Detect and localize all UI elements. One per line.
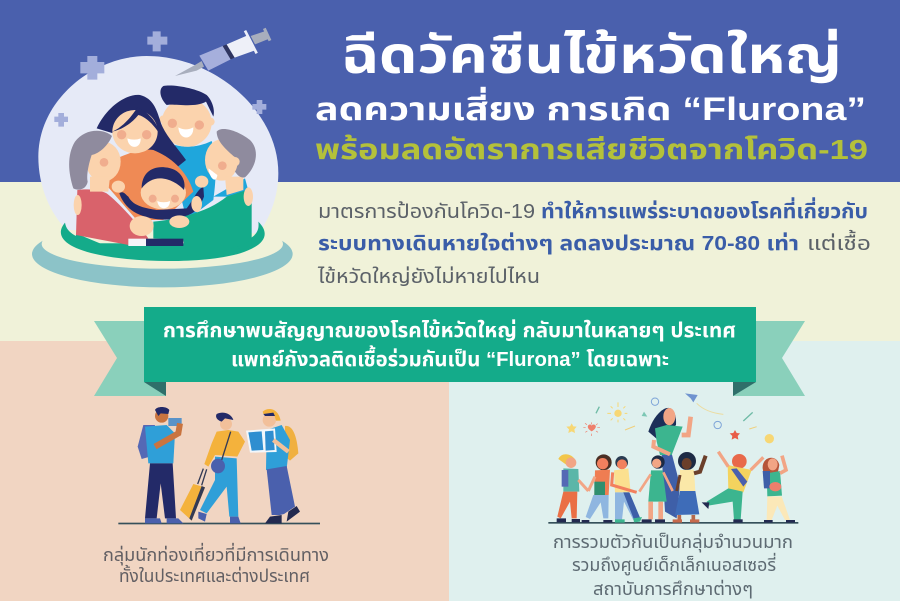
ribbon text: แพทย์กังวลติดเชื้อร่วมกันเป็น “Flurona” โดยเฉพาะ <box>231 345 669 371</box>
child seven <box>763 456 795 523</box>
caption: travellers: ทั้งในประเทศและต่างประเทศ <box>119 564 310 586</box>
caption: gatherings: สถาบันการศึกษาต่างๆ <box>593 579 753 599</box>
panel: cream intro background <box>0 182 900 341</box>
title <box>315 27 868 165</box>
hugging hands and trousers <box>128 196 202 246</box>
traveller with camera <box>138 407 183 523</box>
medical crosses <box>54 31 266 127</box>
caption: gatherings: การรวมตัวกันเป็นกลุ่มจำนวนมาก <box>553 532 793 553</box>
panel: blue header background <box>0 0 900 182</box>
panel: light teal gatherings background <box>449 341 900 601</box>
child five <box>673 452 706 523</box>
traveller with suitcase <box>180 413 245 523</box>
child one <box>557 454 588 522</box>
child six <box>702 452 763 523</box>
caption: travellers: กลุ่มนักท่องเที่ยวที่มีการเดินทาง <box>103 542 329 566</box>
text block: intro paragraph: ทำให้การแพร่ระบาดของโรคที่เกี่ยวกับ <box>541 197 868 223</box>
icon: family inside protective dome <box>32 28 293 287</box>
ribbon text <box>163 320 736 371</box>
icon: teacher and children <box>548 393 798 524</box>
child four <box>639 455 673 523</box>
children <box>557 452 795 523</box>
text block: intro paragraph: ระบบทางเดินหายใจต่างๆ ลดลงประมาณ 70-80 เท่า <box>318 233 799 255</box>
child <box>112 167 208 220</box>
teacher <box>648 408 691 518</box>
traveller with map <box>246 409 300 523</box>
ribbon text: การศึกษาพบสัญญาณของโรคไข้หวัดใหญ่ กลับมาในหลายๆ ประเทศ <box>163 320 736 342</box>
icon: three travellers <box>118 407 320 524</box>
grandfather <box>153 129 256 255</box>
caption: travellers <box>103 542 329 586</box>
father <box>159 86 216 220</box>
title: ลดความเสี่ยง การเกิด “Flurona” <box>315 86 866 127</box>
text block: intro paragraph <box>317 197 871 288</box>
text block: intro paragraph: มาตรการป้องกันโควิด-19 <box>318 201 535 223</box>
caption: gatherings: รวมถึงศูนย์เด็กเล็กเนอสเซอรี่ <box>572 552 776 577</box>
caption: gatherings <box>553 532 793 599</box>
title: พร้อมลดอัตราการเสียชีวิตจากโควิด-19 <box>315 134 868 165</box>
title: ฉีดวัคซีนไข้หวัดใหญ่ <box>341 27 842 85</box>
decorations <box>566 393 774 443</box>
panel: peach travellers background <box>0 341 449 601</box>
child three <box>612 456 642 523</box>
grandmother <box>69 131 148 245</box>
ribbon banner <box>94 307 805 396</box>
child two <box>582 454 612 523</box>
text block: intro paragraph: แต่เชื้อ <box>807 229 871 255</box>
mother <box>97 95 193 220</box>
syringe <box>175 28 270 76</box>
text block: intro paragraph: ไข้หวัดใหญ่ยังไม่หายไปไหน <box>317 265 540 288</box>
